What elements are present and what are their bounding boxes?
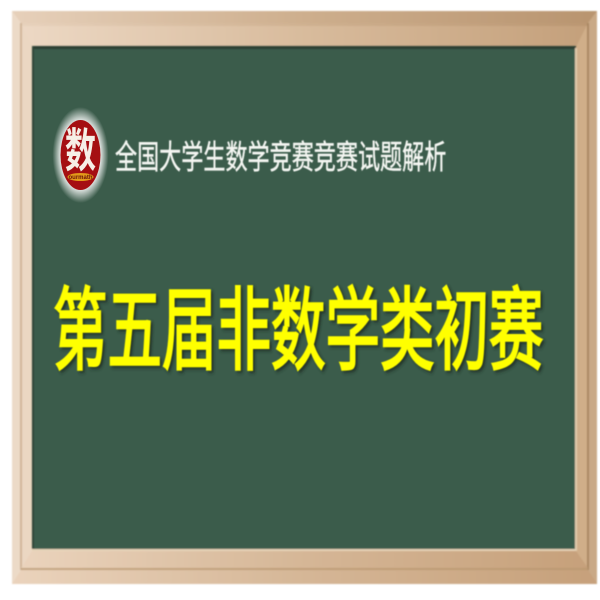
logo glow [52, 107, 108, 203]
green chalkboard [32, 46, 577, 551]
logo character: 数 [65, 126, 96, 178]
logo red oval [60, 120, 100, 190]
logo small label: ourmath [68, 175, 93, 181]
logo badge [52, 107, 108, 203]
main title [53, 280, 545, 383]
title shadow: 第五届非数学类初赛 [55, 282, 545, 383]
title text: 第五届非数学类初赛 [53, 280, 543, 381]
subtitle: 全国大学生数学竞赛竞赛试题解析 [115, 138, 446, 176]
